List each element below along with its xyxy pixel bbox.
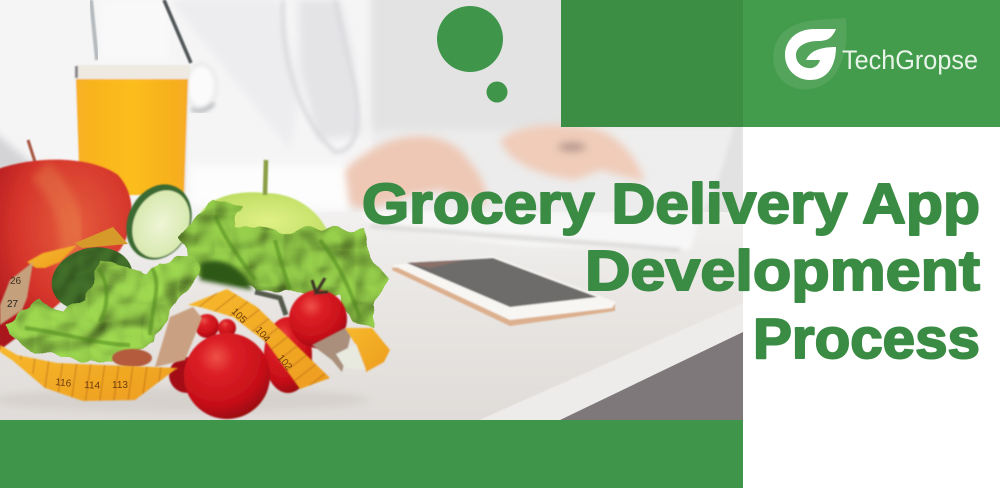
tape numbers: 26 bbox=[10, 276, 22, 287]
stethoscope bbox=[91, 0, 357, 152]
tape numbers: 27 bbox=[7, 299, 19, 310]
photo: doctor at desk background bbox=[0, 0, 752, 420]
title: Grocery Delivery App bbox=[362, 172, 980, 236]
logo leaf bbox=[773, 18, 847, 90]
smartphone bbox=[392, 256, 616, 326]
tape numbers bbox=[7, 276, 294, 392]
tomatoes bbox=[112, 278, 347, 419]
laptop screen bbox=[555, 127, 745, 225]
white panel right bbox=[743, 127, 1000, 488]
doctor white coat bbox=[0, 0, 380, 215]
decorative large green circle bbox=[437, 6, 503, 72]
green apple bbox=[198, 159, 328, 234]
tape numbers: 113 bbox=[112, 380, 128, 391]
tape numbers: 104 bbox=[253, 325, 272, 345]
title: Development bbox=[585, 239, 980, 303]
title: Process bbox=[753, 307, 980, 371]
bottom green bar bbox=[0, 420, 743, 488]
desk surface bbox=[0, 212, 743, 420]
tape numbers: 105 bbox=[229, 306, 249, 326]
measuring tape bbox=[0, 245, 390, 401]
hands typing bbox=[345, 125, 645, 208]
top green block bbox=[561, 0, 743, 127]
cucumber slice bbox=[125, 183, 193, 261]
logo wordmark: TechGropse bbox=[842, 45, 978, 75]
keyboard bbox=[398, 219, 694, 249]
tape numbers: 116 bbox=[55, 377, 72, 390]
dark vegetable bbox=[51, 247, 132, 307]
tape numbers: 114 bbox=[84, 380, 101, 392]
desk edge and shadow bbox=[480, 303, 743, 420]
juice glass bbox=[75, 65, 190, 195]
tape back section bbox=[75, 227, 128, 248]
lettuce left bbox=[3, 253, 200, 362]
logo G mark bbox=[785, 29, 836, 80]
red apple bbox=[0, 140, 132, 350]
lettuce right bbox=[180, 200, 388, 327]
grey wall behind doctor bbox=[378, 0, 561, 124]
tape numbers: 102 bbox=[275, 353, 294, 373]
title bbox=[362, 172, 980, 371]
food shadow on desk bbox=[0, 388, 362, 410]
decorative small green circle bbox=[486, 82, 508, 102]
logo panel bbox=[743, 0, 1000, 127]
